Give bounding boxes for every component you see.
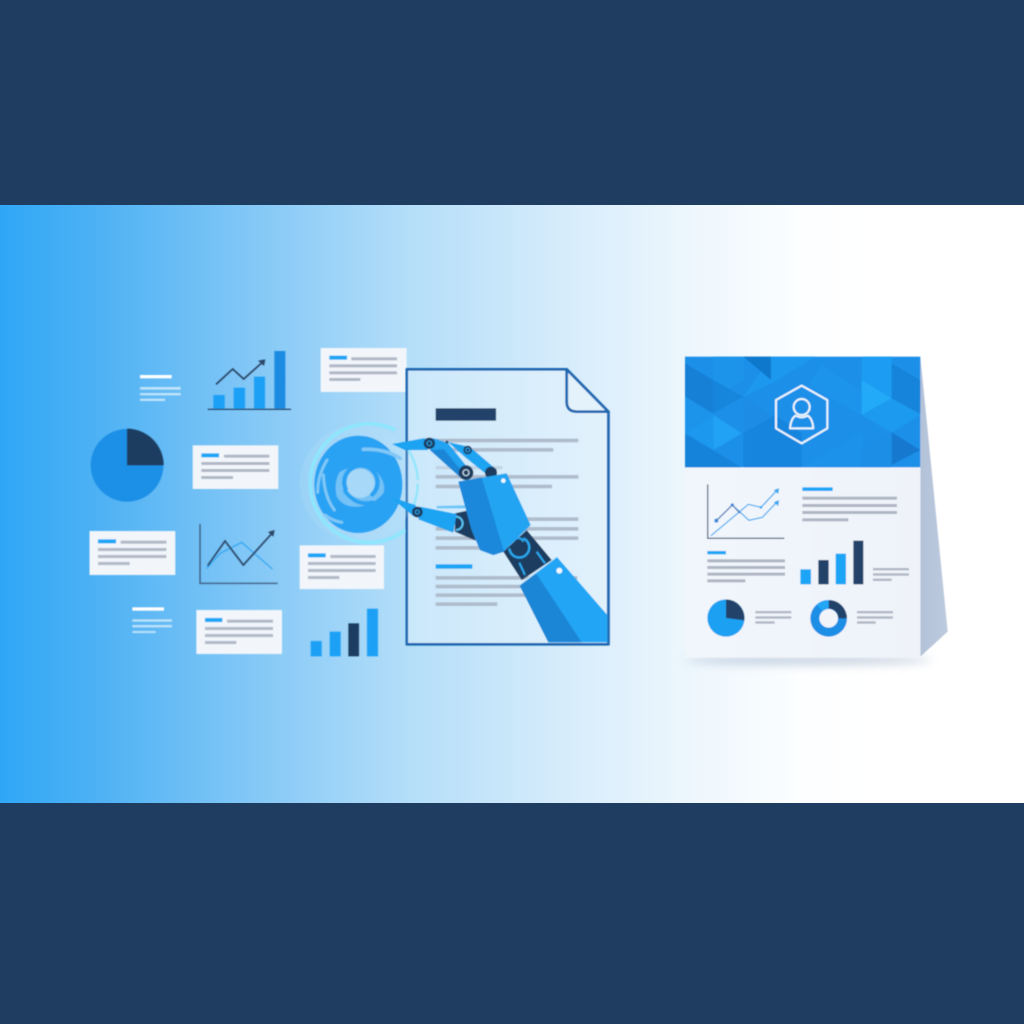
bar chart lower <box>311 609 378 656</box>
header banner <box>685 357 920 467</box>
lower robot finger <box>390 497 476 541</box>
bar chart caption <box>873 568 909 581</box>
report text block 1 <box>802 487 897 521</box>
robot forearm <box>519 557 607 642</box>
side flap <box>920 357 948 657</box>
report pie chart <box>707 599 745 637</box>
document title bar <box>436 408 496 421</box>
page shadow <box>685 656 932 664</box>
fingerprint scan circle <box>300 424 418 543</box>
card right <box>300 545 384 589</box>
text snippet: upper white lines <box>140 375 181 401</box>
page body <box>685 467 920 658</box>
profile hexagon icon <box>776 386 827 443</box>
card top <box>321 348 407 392</box>
document page <box>407 369 608 644</box>
pie caption <box>755 611 791 624</box>
report donut chart <box>810 600 847 637</box>
top navy band <box>0 0 1024 205</box>
pie chart <box>91 429 164 502</box>
report page <box>685 357 948 664</box>
card middle <box>193 445 278 489</box>
report bar chart <box>800 541 863 584</box>
document accent bar <box>436 564 472 569</box>
donut caption <box>857 611 893 624</box>
upper robot fingers <box>392 438 497 480</box>
line chart <box>200 524 278 583</box>
text snippet: lower white lines <box>132 607 172 633</box>
card bottom <box>196 610 282 654</box>
document and robot hand <box>300 369 608 644</box>
report text block 2 <box>707 551 785 582</box>
central gradient band <box>0 205 1024 803</box>
robot wrist <box>503 530 552 580</box>
robot palm <box>458 473 531 555</box>
report line chart <box>708 484 784 538</box>
bottom navy band <box>0 803 1024 1024</box>
bar chart with rising arrow <box>208 351 291 410</box>
left cluster of data elements <box>89 348 407 656</box>
card left <box>89 531 175 575</box>
document text lines <box>436 439 578 606</box>
